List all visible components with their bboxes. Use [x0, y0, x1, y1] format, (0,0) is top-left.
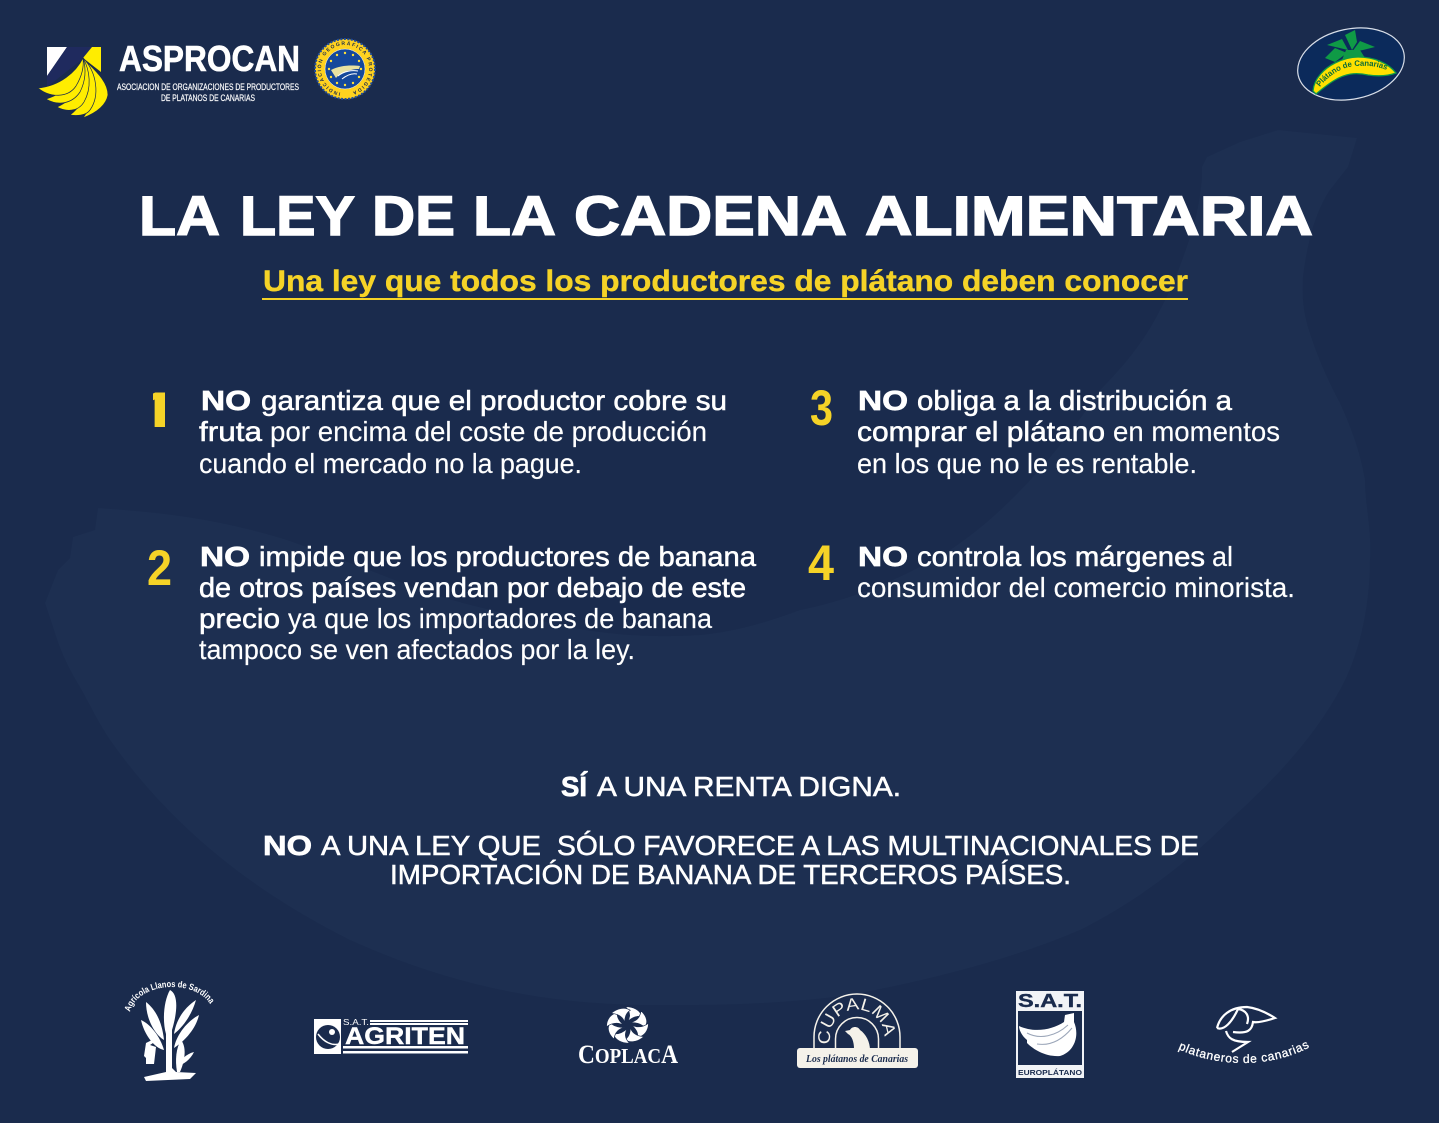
number 1: 1 [134, 380, 182, 447]
text 2: de otros países vendan por debajo de este [199, 572, 746, 603]
text 1: fruta [199, 416, 262, 447]
number 2: 2 [147, 540, 172, 596]
logo: Plátano de Canarias: Plátano de Canarias [1316, 60, 1388, 87]
title: ALIMENTARIA [865, 184, 1313, 247]
title [139, 184, 1313, 247]
logo: S.A.T. Agriten: AGRITEN [345, 1023, 465, 1050]
text 3: NO [858, 385, 908, 416]
item 4 [808, 535, 1295, 603]
logo: S.A.T. Europlátano [1016, 991, 1084, 1078]
logo: Asprocan [38, 38, 376, 118]
icon: Asprocan bananas [38, 47, 108, 118]
item 3 [810, 380, 1280, 479]
logo subtitle [117, 82, 299, 104]
logo: Coplaca [578, 1003, 678, 1069]
text 3: en momentos [1113, 416, 1280, 447]
text 4: al [1212, 541, 1233, 572]
subtitle: Una ley que todos los productores de plátano deben conocer [263, 265, 1188, 298]
text 3: en los que no le es rentable. [857, 448, 1197, 479]
text 2 [199, 541, 756, 665]
logo: Plataneros de Canarias: plataneros de canarias [1178, 1042, 1309, 1064]
title: CADENA [574, 184, 847, 247]
logo subtitle: DE PLATANOS DE CANARIAS [161, 93, 255, 104]
logo subtitle: ASOCIACION DE ORGANIZACIONES DE PRODUCTORES [117, 82, 299, 93]
logo: S.A.T. Europlátano: EUROPLÁTANO [1018, 1068, 1082, 1077]
closing statement: A UNA LEY QUE [321, 830, 541, 861]
logo: S.A.T. Agriten: S.A.T. [343, 1017, 369, 1027]
number 4: 4 [808, 535, 834, 591]
logo: Coplaca: COPLACA [578, 1040, 678, 1069]
logo: Plataneros de Canarias [1178, 1006, 1309, 1064]
logo: Agrícola Llanos de Sardina: Agrícola Llanos de Sardina [124, 981, 214, 1012]
text 2: precio [199, 603, 280, 634]
closing statement: SÓLO FAVORECE A LAS MULTINACIONALES DE [557, 830, 1199, 861]
text 3 [857, 385, 1280, 479]
text 1 [199, 385, 727, 479]
title: LEY [240, 184, 355, 247]
closing statement: NO [263, 830, 312, 861]
closing statement: SÍ [561, 771, 588, 802]
text 3: obliga a la distribución a [917, 385, 1232, 416]
text 1: NO [201, 385, 251, 416]
text 2: ya que los importadores de banana [288, 603, 712, 634]
text 4: controla los márgenes [917, 541, 1205, 572]
text 2: NO [200, 541, 250, 572]
icon: IGP seal: INDICACIÓN GEOGRÁFICA PROTEGIDA [316, 40, 373, 96]
text 1: garantiza que el productor cobre su [261, 385, 727, 416]
title: LA [139, 184, 220, 247]
title: LA [473, 184, 556, 247]
text 2: tampoco se ven afectados por la ley. [199, 634, 635, 665]
number 3: 3 [810, 380, 833, 436]
closing statement: IMPORTACIÓN DE BANANA DE TERCEROS PAÍSES. [390, 859, 1071, 890]
text 1: cuando el mercado no la pague. [199, 448, 582, 479]
logo wordmark: ASPROCAN [119, 38, 300, 79]
logo: Cupalma: Los plátanos de Canarias [805, 1054, 908, 1065]
logo: Cupalma [797, 993, 918, 1068]
background banana silhouette [45, 130, 1370, 1005]
text 3: comprar el plátano [857, 416, 1105, 447]
logo: S.A.T. Europlátano: S.A.T. [1018, 991, 1082, 1011]
logo: Agrícola Llanos de Sardina [124, 981, 214, 1081]
text 4: consumidor del comercio minorista. [857, 572, 1295, 603]
text 4 [857, 541, 1295, 603]
title: DE [372, 184, 455, 247]
closing statement: A UNA RENTA DIGNA. [597, 771, 901, 802]
icon: Coplaca swirl [603, 1003, 652, 1047]
closing statement [263, 771, 1199, 890]
logo: Plátano de Canarias [1297, 27, 1405, 101]
item 1 [153, 390, 726, 480]
text 1: por encima del coste de producción [270, 416, 707, 447]
logo: S.A.T. Agriten [314, 1017, 468, 1054]
item 2 [147, 540, 756, 665]
text 2: impide que los productores de banana [259, 541, 756, 572]
logo: Cupalma: CUPALMA [818, 998, 895, 1044]
text 4: NO [858, 541, 908, 572]
